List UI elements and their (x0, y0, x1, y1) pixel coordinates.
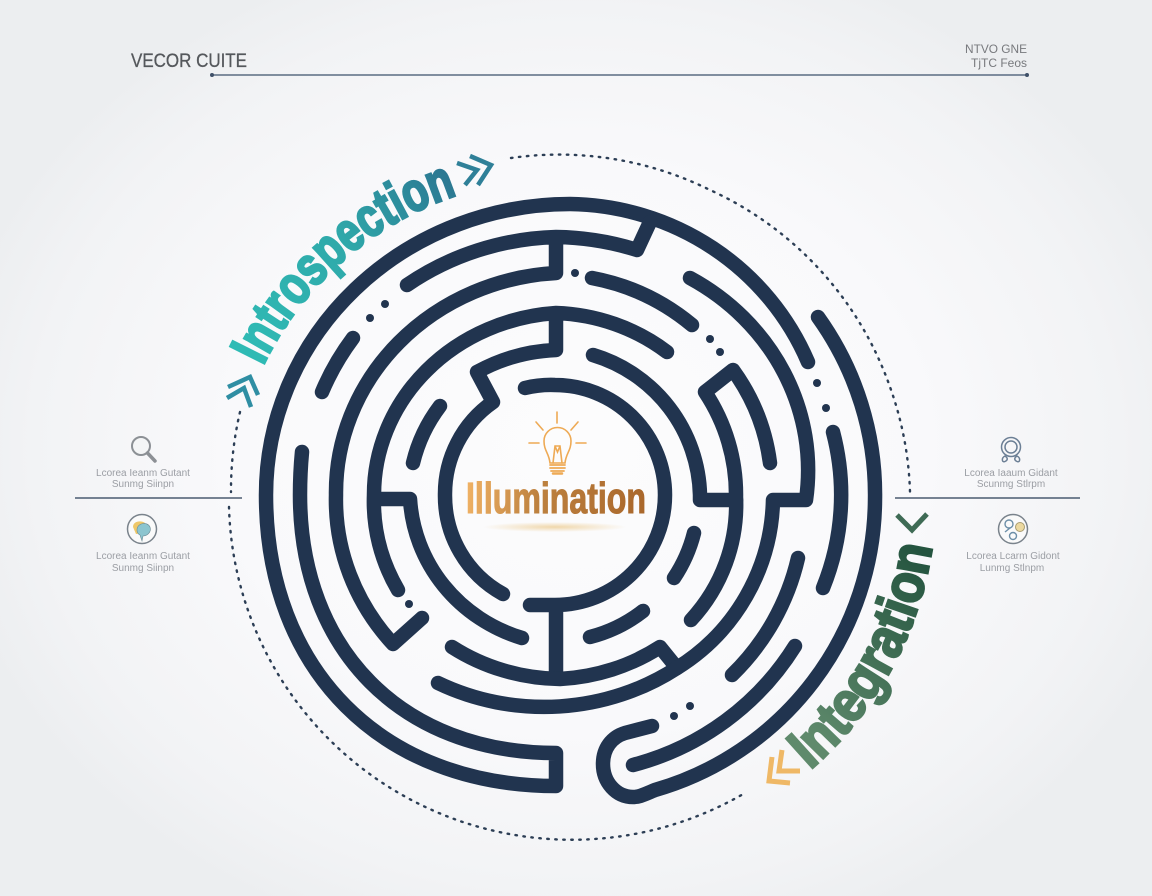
ring two top and ring three left (336, 222, 650, 644)
note one: Lcorea Ieanm Gutant (96, 468, 190, 479)
header note: NTVO GNE (965, 42, 1027, 56)
short arcs (322, 278, 841, 765)
ring four bottom (452, 647, 677, 679)
icon: magnifier (132, 437, 155, 461)
note four (966, 551, 1060, 574)
ring five notch (691, 370, 770, 620)
centre illumination (466, 412, 646, 532)
glow (483, 522, 627, 532)
header note (965, 42, 1027, 70)
heading: illumination: Illumination (466, 474, 646, 523)
ring five upper right (593, 355, 736, 500)
ring four upper (374, 313, 667, 638)
icon: ring (1002, 438, 1020, 462)
note two: Sunmg Siinpn (112, 563, 174, 574)
note one: Sunmg Siinpn (112, 479, 174, 490)
maze dots (366, 269, 830, 720)
note three: Scunmg Stlrpm (977, 479, 1045, 490)
integration curved label: Integration (784, 544, 934, 770)
header rule (210, 73, 1029, 77)
chevrons: introspection end (457, 156, 491, 185)
note three: Lcorea Iaaum Gidant (964, 468, 1058, 479)
chevrons: integration start (769, 750, 800, 783)
icon: linked shapes (998, 514, 1028, 544)
note four: Lunmg Stlnpm (980, 563, 1044, 574)
note two: Lcorea Ieanm Gutant (96, 551, 190, 562)
note one (96, 468, 190, 490)
ring three bottom and right (438, 278, 808, 707)
introspection curved label: Introspection (228, 168, 456, 365)
outer ring with ring two return (266, 204, 808, 786)
header note: TjTC Feos (971, 56, 1027, 70)
maze (266, 204, 875, 797)
chevrons: introspection start (227, 377, 258, 407)
inner ring (525, 385, 665, 678)
side divider lines (75, 497, 1080, 499)
right notes (964, 438, 1060, 574)
note two (96, 551, 190, 574)
header (131, 42, 1029, 77)
chevron: integration end (897, 514, 927, 530)
icon: speech heads (128, 514, 156, 544)
note four: Lcorea Lcarm Gidont (966, 551, 1060, 562)
icon: light bulb (529, 412, 586, 474)
note three (964, 468, 1058, 490)
dotted orbit (229, 155, 910, 840)
outer right with u turn (603, 317, 875, 797)
title: vecor cuite: VECOR CUITE (131, 51, 247, 72)
left notes (96, 437, 190, 574)
